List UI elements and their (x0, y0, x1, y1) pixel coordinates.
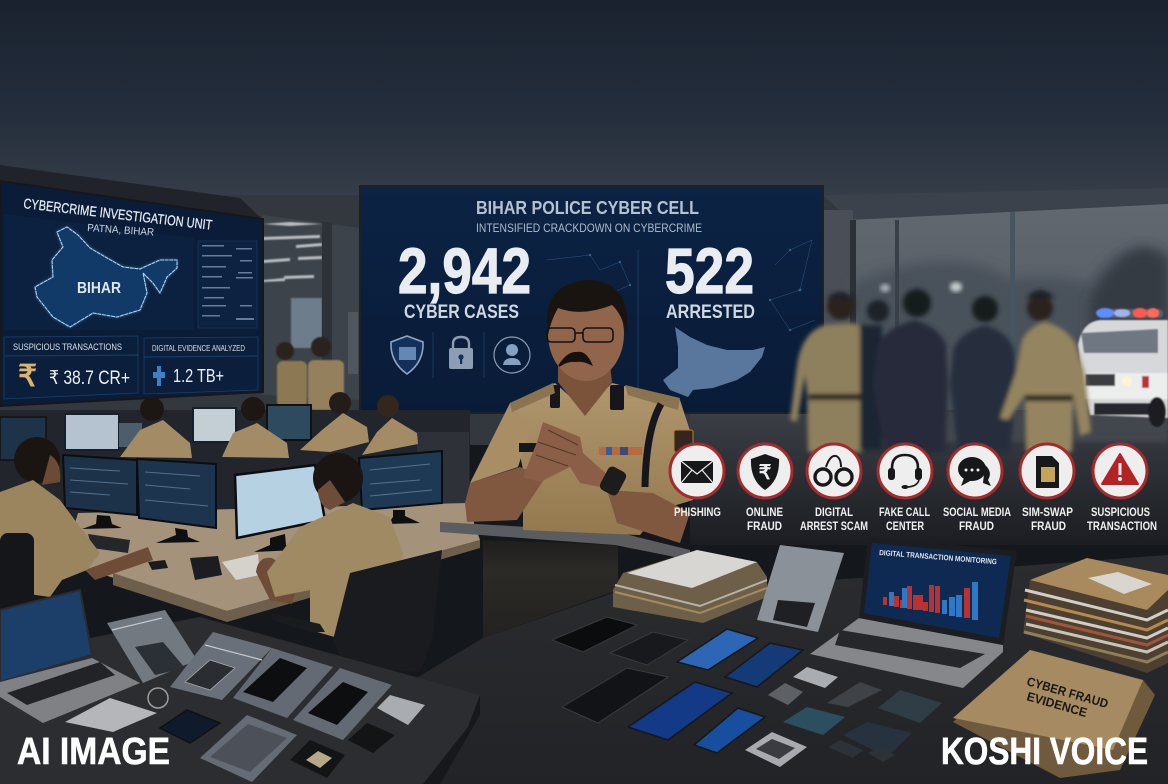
panel: digital evidence analyzed: DIGITAL EVIDENCE ANALYZED (152, 343, 245, 353)
foreground monitors (63, 451, 442, 580)
back officers (120, 392, 418, 458)
icon: digital arrest scam: DIGITAL (815, 505, 853, 519)
hair (547, 280, 628, 335)
black strap (645, 404, 661, 487)
right evidence: papers and bag (613, 545, 844, 632)
seated officers and monitors row (0, 392, 470, 520)
stat: arrested: ARRESTED (666, 302, 755, 323)
ribbons (599, 447, 642, 455)
data table (198, 241, 257, 328)
map silhouette (663, 327, 765, 397)
panel: suspicious transactions (4, 336, 138, 399)
map of Bihar: BIHAR (77, 280, 121, 297)
folder: cyber fraud evidence: CYBER FRAUD (1025, 674, 1110, 711)
stat: cyber cases: CYBER CASES (404, 302, 519, 323)
standing officers in corridor (276, 337, 344, 410)
seated officer right with chair (256, 453, 442, 672)
panel: suspicious transactions: ₹ 38.7 CR+ (49, 368, 130, 389)
centre table and floor (370, 555, 1168, 784)
central officer (465, 280, 693, 543)
screen title: CYBERCRIME INVESTIGATION UNIT (23, 195, 214, 233)
person: suspect centre right (950, 296, 1017, 452)
icon: phishing (670, 444, 724, 519)
shoulder badge (674, 430, 693, 452)
icon: lock (449, 337, 473, 369)
icon: sim-swap fraud: SIM-SWAP (1022, 505, 1073, 519)
uniform torso (510, 383, 693, 535)
panel: digital evidence analyzed: 1.2 TB+ (173, 366, 224, 386)
podium (440, 522, 690, 638)
moustache (559, 353, 591, 366)
screen subheading: INTENSIFIED CRACKDOWN ON CYBERCRIME (476, 223, 702, 235)
icon: social media fraud (943, 444, 1011, 533)
right forearm (607, 490, 690, 543)
seated officer left (0, 437, 153, 607)
screen: Bihar Police Cyber Cell (360, 186, 823, 413)
icon: online fraud (738, 444, 792, 533)
icon: social media fraud: SOCIAL MEDIA (943, 505, 1011, 519)
network pattern (433, 240, 815, 400)
shoulder straps (510, 383, 555, 412)
collar tabs (550, 385, 560, 408)
phones and circuit boards on table (552, 617, 942, 767)
person: suspect centre left (873, 289, 948, 452)
icon: fake call center: FAKE CALL (879, 505, 930, 519)
neck (558, 365, 612, 416)
folder: cyber fraud evidence: EVIDENCE (1025, 689, 1089, 720)
right floor band (690, 410, 1168, 545)
icon: suspicious transaction (1087, 444, 1157, 533)
panel: digital evidence analyzed (144, 337, 258, 394)
icon: fake call center: CENTER (886, 519, 924, 533)
evidence table left (0, 617, 480, 784)
clasped hands (523, 422, 610, 487)
tan desk (63, 503, 480, 622)
icon: social media fraud: FRAUD (959, 519, 994, 533)
bar chart (883, 582, 978, 620)
left forearm (465, 467, 545, 522)
window with outdoor view (850, 204, 1168, 432)
panel: suspicious transactions: ₹ (18, 360, 37, 393)
icon: online fraud: ONLINE (746, 505, 783, 519)
screen heading: BIHAR POLICE CYBER CELL (476, 197, 699, 218)
person: officer right (1000, 290, 1091, 452)
screen: cybercrime investigation unit (0, 181, 263, 406)
icon: suspicious transaction: SUSPICIOUS (1091, 505, 1150, 519)
icon: phishing: PHISHING (674, 505, 721, 519)
finger lines (536, 430, 578, 466)
icon: user (494, 337, 530, 373)
police car (1078, 308, 1168, 427)
icon: online fraud: ₹ (759, 462, 772, 484)
icon: sim-swap fraud: FRAUD (1031, 519, 1066, 533)
stat: arrested: 522 (665, 235, 754, 307)
wristwatch (598, 465, 628, 497)
laptop left (0, 590, 140, 723)
laptop screen title: DIGITAL TRANSACTION MONITORING (879, 548, 997, 566)
folder stack (1023, 558, 1168, 673)
name plate (519, 443, 537, 452)
back office corridor (262, 215, 360, 400)
screen subtitle: PATNA, BIHAR (87, 222, 155, 239)
icon: shield (391, 336, 423, 374)
icon: online fraud: FRAUD (747, 519, 782, 533)
back monitors (0, 405, 311, 460)
caption: AI IMAGE: AI IMAGE (17, 731, 170, 773)
head (548, 287, 624, 381)
evidence bags and phones left (65, 610, 425, 782)
left sleeve (470, 403, 530, 483)
stat: cyber cases: 2,942 (398, 235, 531, 307)
person: suspect behind (860, 300, 889, 450)
folder: cyber fraud evidence (953, 650, 1155, 778)
icon row: cybercrime categories (670, 444, 1157, 533)
laptop right: digital transaction monitoring (810, 537, 1017, 688)
icon: sim-swap fraud (1020, 444, 1074, 533)
escorted suspects and officers (790, 289, 1091, 452)
panel: suspicious transactions: SUSPICIOUS TRANSACTIONS (13, 342, 122, 353)
icon: digital arrest scam (800, 444, 868, 533)
icon: fake call center (878, 444, 932, 533)
glasses (547, 328, 613, 342)
icon: digital arrest scam: ARREST SCAM (800, 519, 868, 533)
map of Bihar (35, 227, 177, 327)
person: officer left (790, 292, 880, 452)
